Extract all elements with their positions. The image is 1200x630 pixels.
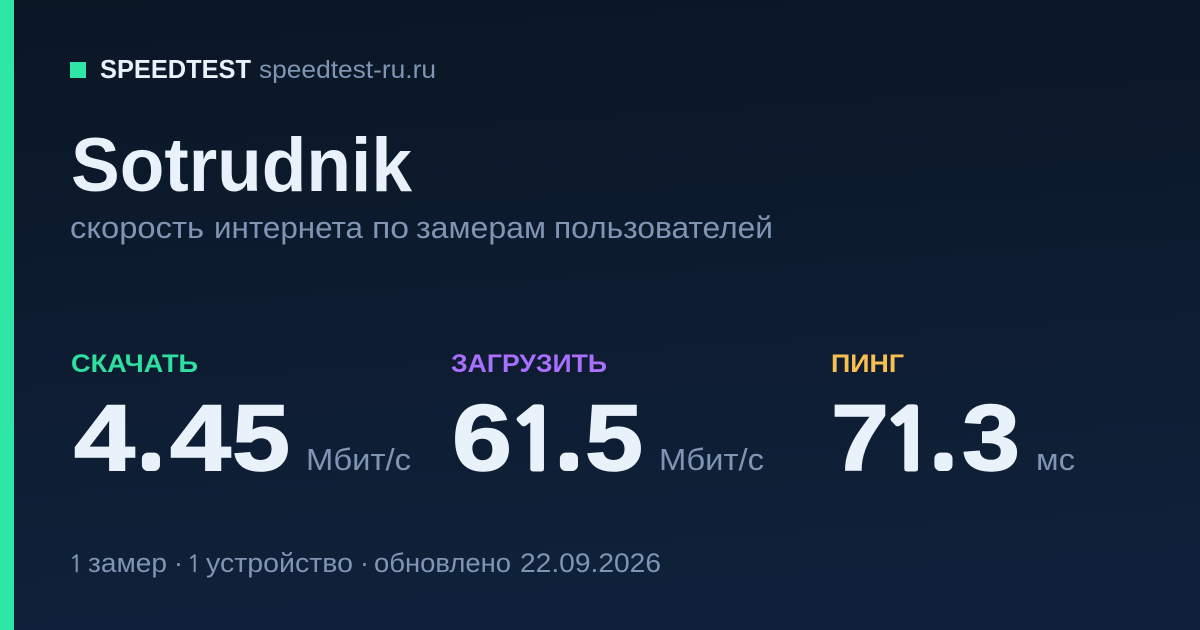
- download label: СКАЧАТЬ: [71, 350, 198, 378]
- footer note: 1: [69, 553, 83, 576]
- ping value: [831, 385, 1020, 490]
- metric: download: [71, 350, 411, 490]
- icon: brand square: [70, 62, 86, 78]
- download unit: Мбит/с: [306, 442, 411, 477]
- accent bar: [0, 0, 14, 630]
- subtitle: замерам: [416, 210, 546, 245]
- metric: upload: [451, 350, 764, 490]
- subtitle: скорость: [70, 210, 204, 245]
- download value: .: [145, 427, 157, 475]
- metric: ping: [831, 350, 1075, 490]
- footer note: 22.09.2026: [520, 548, 661, 578]
- brand name: SPEEDTEST: [100, 54, 251, 84]
- footer note: обновлено: [374, 548, 511, 578]
- footer note: устройство: [206, 548, 353, 578]
- upload value: 5: [585, 385, 643, 490]
- ping value: .: [938, 427, 949, 475]
- subtitle: по: [372, 210, 409, 245]
- footer note: замер: [88, 548, 167, 578]
- upload value: 1: [506, 399, 564, 483]
- ping value: 7: [831, 385, 889, 490]
- download value: [74, 385, 290, 490]
- footer note: [69, 548, 661, 578]
- subtitle: интернета: [214, 210, 364, 245]
- brand domain: speedtest-ru.ru: [259, 56, 436, 84]
- upload value: 6: [452, 385, 512, 490]
- upload value: [452, 385, 643, 490]
- upload label: ЗАГРУЗИТЬ: [451, 350, 607, 378]
- footer note: 1: [187, 553, 201, 576]
- download value: 5: [232, 385, 290, 490]
- subtitle: [70, 210, 773, 245]
- ping label: ПИНГ: [831, 350, 904, 378]
- download value: 4: [170, 385, 231, 490]
- upload unit: Мбит/с: [659, 442, 764, 477]
- download value: 4: [74, 385, 135, 490]
- footer note: ·: [174, 548, 183, 578]
- upload value: .: [563, 427, 575, 475]
- footer note: ·: [360, 548, 369, 578]
- ping value: 3: [962, 385, 1020, 490]
- ping unit: мс: [1036, 442, 1075, 477]
- title: Sotrudnik: [71, 123, 413, 208]
- subtitle: пользователей: [554, 210, 773, 245]
- ping value: 1: [880, 399, 938, 483]
